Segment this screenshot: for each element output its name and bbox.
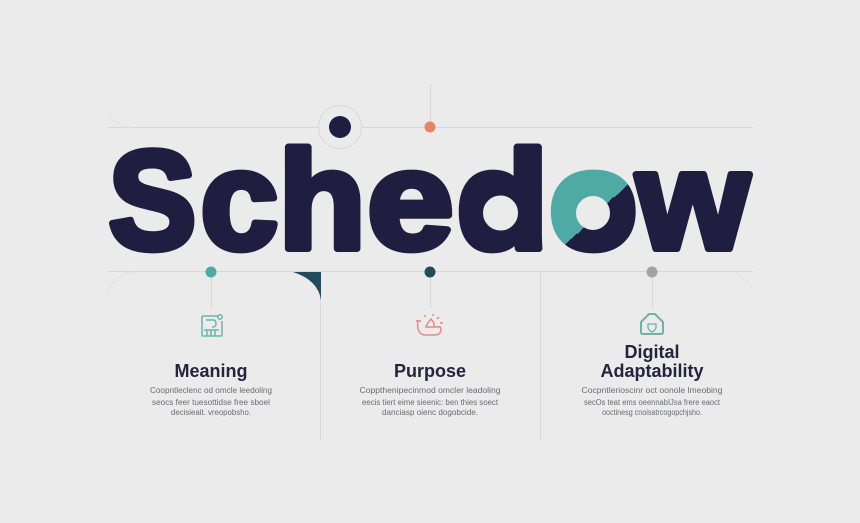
body text: Cocpntlerioscinr oct oonole lmeobing (582, 386, 722, 395)
node: grey (646, 266, 658, 278)
body text: Coppthenipecinmod omcler leadoling (360, 386, 500, 395)
body text: ooctinesg cnoisatrcogopchjsho. (602, 408, 702, 417)
body text (360, 386, 500, 417)
title (108, 122, 750, 279)
ring with navy dot (318, 106, 362, 148)
panel: Digital Adaptability (582, 266, 722, 417)
title: c (200, 122, 278, 278)
body text (582, 386, 722, 417)
icon: shield house (641, 314, 663, 334)
title: w (635, 123, 750, 279)
title: e (367, 123, 454, 279)
icon: circuit board (202, 315, 222, 336)
body text: eecis tiert eime sieenic: ben thies soect (362, 398, 499, 407)
node: teal (206, 266, 216, 278)
body text: decisieait. vreopobsho. (171, 408, 251, 417)
title: h (278, 122, 366, 278)
panel: Purpose (360, 266, 500, 417)
coral dot (424, 122, 436, 132)
heading: Digital (624, 342, 680, 362)
body text: Coopntleclenc od omcle leedoling (150, 386, 272, 395)
icon: sun and hand (416, 314, 443, 335)
panel: Digital Adaptability: Adaptability (600, 361, 704, 381)
panel: Meaning (150, 266, 272, 417)
heading: Meaning (174, 361, 248, 381)
title: o (549, 123, 638, 279)
body text: seocs feer tuesottidse free sboel (152, 398, 270, 407)
heading: Purpose (394, 361, 466, 381)
corner accent (293, 272, 321, 300)
body text: secOs teat ems oeennabIJsa frere eaoct (584, 398, 721, 407)
title: S (108, 122, 196, 278)
body text (150, 386, 272, 417)
title: d (456, 122, 549, 278)
body text: danciasp oienc dogobcide. (382, 408, 478, 417)
node: dark (424, 266, 436, 278)
